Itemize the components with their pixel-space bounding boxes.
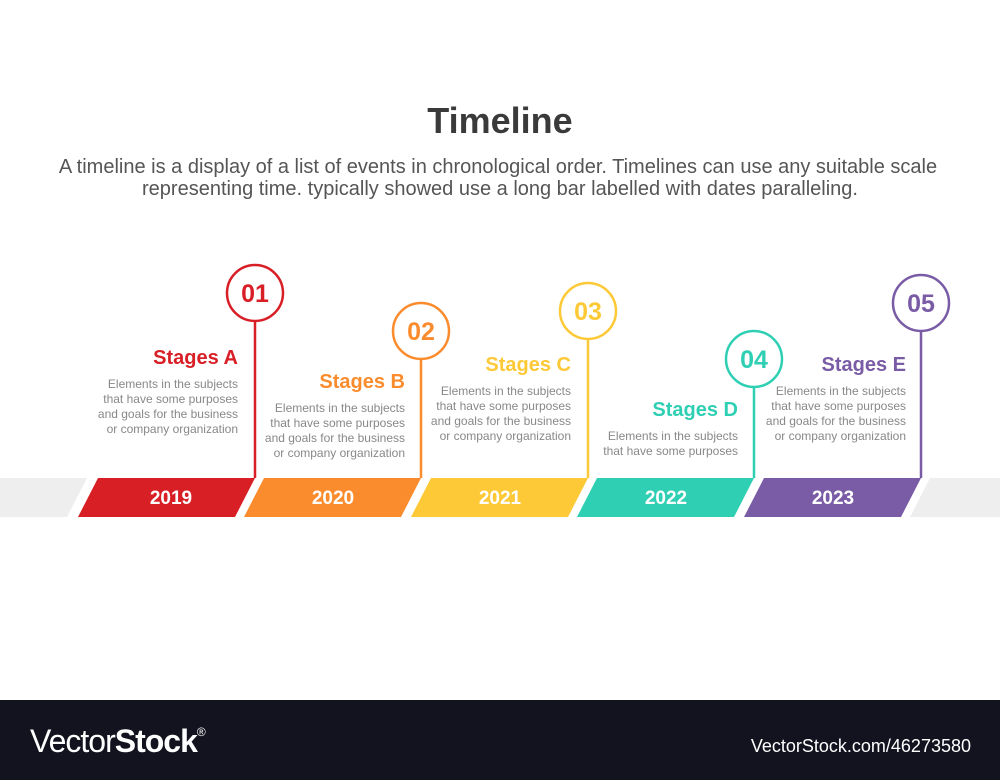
- footer bar: ®: [197, 725, 206, 739]
- stage A text: [98, 347, 238, 436]
- subtitle: [59, 156, 937, 200]
- stage C text: Elements in the subjects: [441, 384, 571, 398]
- marker 03: [560, 283, 616, 478]
- stage C text: that have some purposes: [436, 399, 571, 413]
- stage C text: Stages C: [485, 354, 571, 376]
- marker 03: 03: [574, 298, 602, 326]
- footer bar: VectorStock: [30, 723, 197, 759]
- segment 2023: [744, 478, 921, 517]
- stage B text: that have some purposes: [270, 416, 405, 430]
- segment 2020: 2020: [312, 488, 354, 509]
- stage A text: and goals for the business: [98, 407, 238, 421]
- stage E text: or company organization: [775, 429, 906, 443]
- stage B text: [265, 371, 405, 460]
- segment 2019: [78, 478, 255, 517]
- segment 2022: 2022: [645, 488, 687, 509]
- stage E text: and goals for the business: [766, 414, 906, 428]
- stage B text: Elements in the subjects: [275, 401, 405, 415]
- segment 2023: 2023: [812, 488, 854, 509]
- footer bar: [0, 700, 1000, 780]
- stage A text: that have some purposes: [103, 392, 238, 406]
- marker 01: 01: [241, 280, 269, 308]
- stage B text: and goals for the business: [265, 431, 405, 445]
- stage E text: Elements in the subjects: [776, 384, 906, 398]
- marker 04: 04: [740, 346, 768, 374]
- stage E text: that have some purposes: [771, 399, 906, 413]
- segment 2020: [244, 478, 421, 517]
- title: Timeline: [427, 100, 573, 141]
- marker 05: 05: [907, 290, 935, 318]
- marker 02: 02: [407, 318, 435, 346]
- stage C text: or company organization: [440, 429, 571, 443]
- stage C text: and goals for the business: [431, 414, 571, 428]
- segment 2021: 2021: [479, 488, 522, 509]
- marker 04: [726, 331, 782, 478]
- stage E text: [766, 354, 906, 443]
- marker 01: [227, 265, 283, 478]
- subtitle: A timeline is a display of a list of events in chronological order. Timelines can use any suitable scale: [59, 156, 937, 178]
- stage D text: that have some purposes: [603, 444, 738, 458]
- stage D text: Elements in the subjects: [608, 429, 738, 443]
- stage D text: [603, 399, 738, 458]
- stage B text: or company organization: [274, 446, 405, 460]
- stage A text: Stages A: [153, 347, 238, 369]
- marker 05: [893, 275, 949, 478]
- footer bar: VectorStock.com/46273580: [751, 736, 971, 756]
- timeline bar: [0, 478, 1000, 517]
- stage A text: Elements in the subjects: [108, 377, 238, 391]
- stage D text: Stages D: [652, 399, 738, 421]
- stage E text: Stages E: [822, 354, 906, 376]
- segment 2021: [411, 478, 588, 517]
- stage C text: [431, 354, 571, 443]
- stage A text: or company organization: [107, 422, 238, 436]
- stage B text: Stages B: [319, 371, 405, 393]
- marker 02: [393, 303, 449, 478]
- segment 2022: [577, 478, 754, 517]
- segment 2019: 2019: [150, 488, 192, 509]
- subtitle: representing time. typically showed use a long bar labelled with dates paralleling.: [142, 178, 858, 200]
